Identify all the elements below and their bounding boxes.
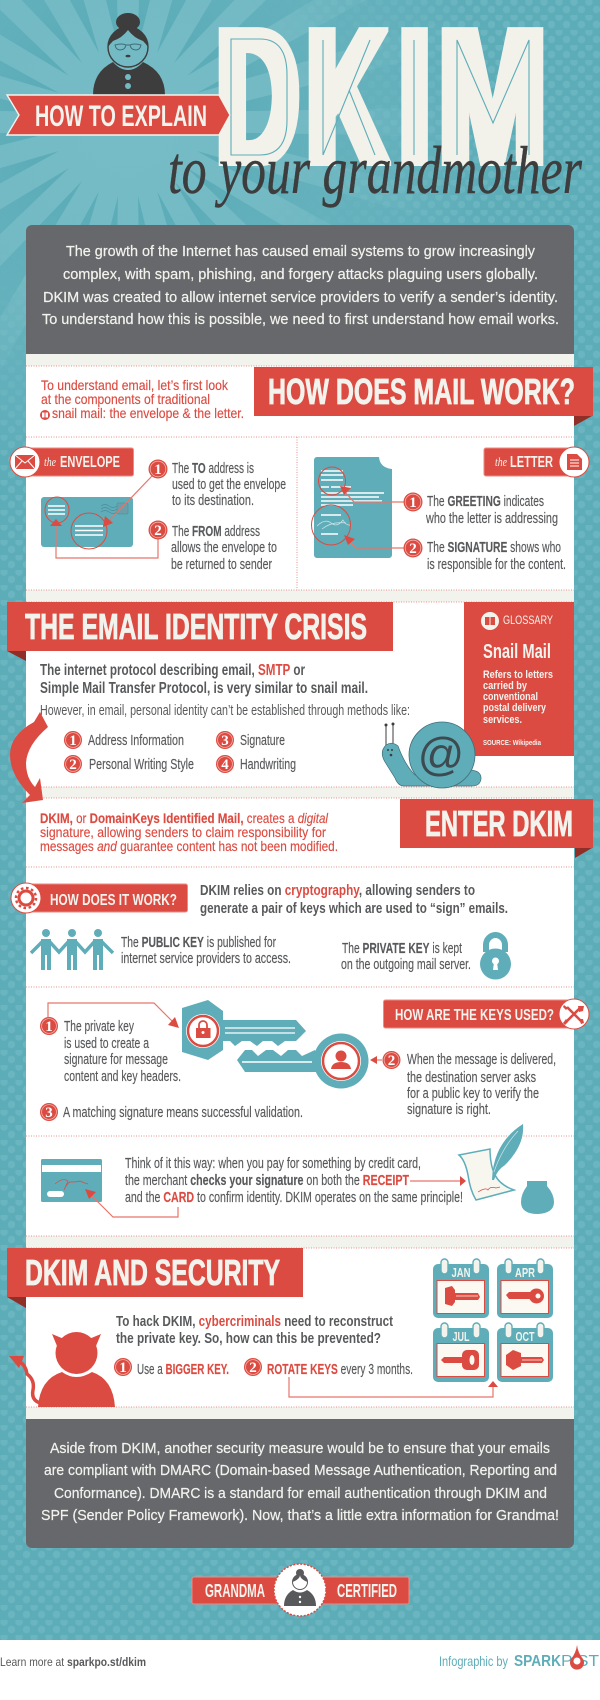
text: credit card analogy: Think of it this way: when you pay for something by credit card, [125, 1156, 421, 1172]
list: identity methods: 2 [69, 757, 77, 773]
text: cryptography: generate a pair of keys which are used to “sign” emails. [200, 901, 508, 917]
panel: glossary: Refers to letters [483, 669, 553, 681]
text: from address: allows the envelope to [171, 540, 277, 556]
icon: padlock [480, 935, 511, 980]
text: to address: used to get the envelope [172, 477, 286, 493]
text: dkim definition: DKIM, or DomainKeys Identified Mail, creates a digital [40, 810, 329, 826]
text: credit card analogy: the merchant checks your signature on both the RECEIPT [125, 1173, 409, 1189]
badge: envelope 2: 2 [154, 523, 162, 539]
text: hacking dkim: To hack DKIM, cybercriminals need to reconstruct [116, 1314, 393, 1330]
arrow: rotate keys to calendars [289, 1377, 498, 1397]
panel: glossary: carried by [483, 680, 528, 692]
illustration: public key [237, 1034, 368, 1088]
heading: dkim and security: DKIM AND SECURITY [25, 1252, 280, 1293]
text: private key: The PRIVATE KEY is kept [342, 941, 462, 957]
text: step 2: signature is right. [407, 1102, 491, 1118]
badge: step 2 with arrow [370, 1051, 400, 1069]
list: identity methods: Personal Writing Style [89, 757, 194, 773]
panel: intro: complex, with spam, phishing, and forgery attacks plaguing users globally. [63, 266, 538, 283]
panel: intro: To understand how this is possible, we need to first understand how email works. [42, 311, 559, 328]
badge: grandma certified: CERTIFIED [337, 1581, 397, 1601]
list: identity methods: 4 [221, 757, 229, 773]
calendar: jan [433, 1259, 489, 1318]
badge: envelope 1 [148, 460, 168, 478]
tag: the letter: the [495, 454, 507, 469]
text: private key: on the outgoing mail server. [341, 957, 471, 973]
solution: rotate keys: ROTATE KEYS every 3 months. [267, 1362, 413, 1378]
text: hacking dkim: the private key. So, how can this be prevented? [116, 1331, 381, 1347]
illustration: envelope [41, 476, 158, 558]
tag: the letter [484, 447, 589, 477]
icon: credit card [41, 1159, 102, 1202]
text: understanding email: at the components of traditional [41, 391, 210, 407]
arrow: card to credit card icon [85, 1189, 178, 1217]
footer: background [0, 1640, 600, 1700]
calendar: oct [497, 1323, 553, 1382]
icon: quill, receipt and ink [459, 1124, 554, 1214]
solution: rotate keys: 2 [249, 1360, 257, 1376]
icon: grandmother [93, 13, 165, 95]
icon: snail: @ [418, 728, 464, 780]
text: understanding email [40, 377, 244, 421]
text: step 1: is used to create a [64, 1036, 150, 1052]
text: step 2: for a public key to verify the [407, 1086, 539, 1102]
text: public key: The PUBLIC KEY is published for [121, 935, 276, 951]
text: public key: internet service providers to access. [121, 951, 291, 967]
icon: snail [382, 722, 481, 788]
badge: grandma certified: GRANDMA [205, 1581, 265, 1601]
calendar: oct: OCT [516, 1329, 535, 1344]
text: hacking dkim [116, 1314, 393, 1347]
text: step 1: content and key headers. [64, 1069, 181, 1085]
text: dkim definition [40, 810, 338, 854]
tag: the envelope: the [44, 454, 56, 469]
step 3: 3 [45, 1105, 53, 1121]
tag: how are the keys used [384, 999, 589, 1029]
text: to address: to its destination. [172, 493, 254, 509]
text: step 1: signature for message [64, 1052, 168, 1068]
badge: letter 1: 1 [409, 495, 417, 511]
badge: grandma certified [192, 1564, 409, 1616]
text: dkim definition: signature, allowing senders to claim responsibility for [40, 824, 326, 840]
arrow: curved down to enter dkim [10, 712, 48, 803]
tag: the envelope: ENVELOPE [60, 454, 120, 471]
footer: sparkpost credit: SPARK [514, 1653, 561, 1670]
panel: glossary: Snail Mail [483, 641, 551, 663]
illustration: private key [182, 1000, 306, 1060]
list: identity methods: 1 [69, 733, 77, 749]
illustration: letter [312, 457, 404, 558]
arrow: step 1 to private key [48, 1003, 179, 1028]
text: credit card analogy: and the CARD to confirm identity. DKIM operates on the same principle! [125, 1190, 463, 1206]
badge: letter 2 [404, 538, 422, 558]
list: identity methods: Address Information [88, 733, 184, 749]
panel: intro: The growth of the Internet has caused email systems to grow increasingly [66, 243, 535, 260]
panel: glossary [464, 602, 574, 756]
arrow: receipt to paper [410, 1176, 466, 1186]
panel: intro: DKIM was created to allow internet service providers to verify a sender’s identity. [43, 289, 558, 306]
text: to address [172, 461, 286, 509]
icon: devil [9, 1332, 115, 1407]
text: signature: The SIGNATURE shows who [427, 540, 561, 556]
badge: letter 1 [404, 492, 422, 512]
footer: sparkpost credit: Infographic by [439, 1653, 508, 1669]
text: public key [121, 935, 291, 967]
list: identity methods: Handwriting [240, 757, 296, 773]
panel: dmarc closing: are compliant with DMARC (Domain-based Message Authentication, Reporting and [44, 1462, 557, 1479]
text: dkim definition: messages and guarantee content has not been modified. [40, 838, 338, 854]
text: greeting [425, 494, 558, 527]
text: to address: The TO address is [172, 461, 254, 477]
panel: dmarc closing: Aside from DKIM, another security measure would be to ensure that your emails [50, 1440, 550, 1457]
footer: sparkpost credit [439, 1645, 599, 1670]
ribbon: how to explain [7, 95, 230, 135]
heading: dkim and security [7, 1248, 303, 1308]
panel: glossary: conventional [483, 691, 538, 703]
badge: letter 2: 2 [409, 541, 417, 557]
calendar: apr [497, 1259, 553, 1318]
text: from address [171, 524, 277, 573]
solution: rotate keys [244, 1358, 413, 1378]
heading: email identity crisis [7, 602, 393, 661]
badge: step 1: 1 [45, 1019, 53, 1035]
step 3: A matching signature means successful validation. [63, 1105, 303, 1121]
calendar: jan: JAN [452, 1265, 470, 1280]
text: from address: The FROM address [172, 524, 260, 540]
footer: learn more: Learn more at sparkpo.st/dkim [0, 1655, 146, 1669]
solution: bigger key: Use a BIGGER KEY. [137, 1362, 229, 1378]
panel: intro [26, 225, 574, 354]
panel: glossary: SOURCE: Wikipedia [483, 740, 541, 747]
text: smtp explanation [40, 662, 410, 719]
tag: the letter: LETTER [510, 454, 553, 471]
text: private key [341, 941, 471, 973]
footer: sparkpost credit: P ST [561, 1653, 599, 1670]
text: step 1: The private key [64, 1019, 135, 1035]
panel: glossary: services. [483, 714, 522, 726]
panel: dmarc closing: Conformance). DMARC is a standard for email authentication through DKIM and [54, 1485, 547, 1502]
badge: envelope 1: 1 [154, 462, 162, 478]
text: greeting: who the letter is addressing [425, 511, 558, 527]
panel: glossary: postal delivery [483, 702, 547, 714]
text: smtp explanation: The internet protocol describing email, SMTP or [40, 662, 305, 679]
text: understanding email: snail mail: the envelope & the letter. [52, 405, 244, 421]
text: step 2 [407, 1052, 556, 1118]
text: signature [427, 540, 566, 573]
heading: email identity crisis: THE EMAIL IDENTITY CRISIS [25, 606, 367, 647]
title: DKIM [217, 0, 546, 206]
text: credit card analogy [125, 1156, 463, 1206]
ribbon: how to explain: HOW TO EXPLAIN [35, 100, 207, 133]
list: identity methods: 3 [221, 733, 229, 749]
tag: how does it work [11, 883, 188, 913]
badge: step 2 with arrow: 2 [388, 1053, 395, 1069]
badge: envelope 2 [148, 520, 168, 540]
text: cryptography [200, 883, 508, 917]
icon: people [31, 929, 113, 970]
heading: how does mail work [254, 367, 593, 426]
solution: bigger key: 1 [119, 1360, 127, 1376]
tag: the envelope [10, 447, 134, 477]
panel: dmarc closing: SPF (Sender Policy Framework). Now, that’s a little extra information for Grandma! [41, 1507, 559, 1524]
text: smtp explanation: Simple Mail Transfer Protocol, is very similar to snail mail. [40, 680, 368, 697]
list: identity methods: Signature [240, 733, 285, 749]
text: step 2: the destination server asks [407, 1070, 536, 1086]
text: from address: be returned to sender [171, 557, 272, 573]
text: understanding email: To understand email, let’s first look [41, 377, 229, 393]
text: greeting: The GREETING indicates [427, 494, 544, 510]
calendar: jul [433, 1323, 489, 1382]
panel: glossary: GLOSSARY [503, 613, 553, 627]
text: step 1 [64, 1019, 181, 1085]
text: cryptography: DKIM relies on cryptography, allowing senders to [200, 883, 475, 899]
tag: how does it work: HOW DOES IT WORK? [50, 892, 177, 909]
panel: page card [26, 340, 574, 1430]
calendar: jul: JUL [452, 1329, 470, 1344]
text: smtp explanation: However, in email, personal identity can’t be established through methods like: [40, 702, 410, 719]
badge: step 1 [40, 1017, 58, 1035]
step 3 [40, 1103, 303, 1121]
solution: bigger key [114, 1358, 229, 1378]
panel: dmarc closing [26, 1419, 574, 1548]
heading: enter dkim [400, 799, 593, 858]
calendar: apr: APR [515, 1265, 535, 1280]
list: identity methods [64, 731, 296, 773]
